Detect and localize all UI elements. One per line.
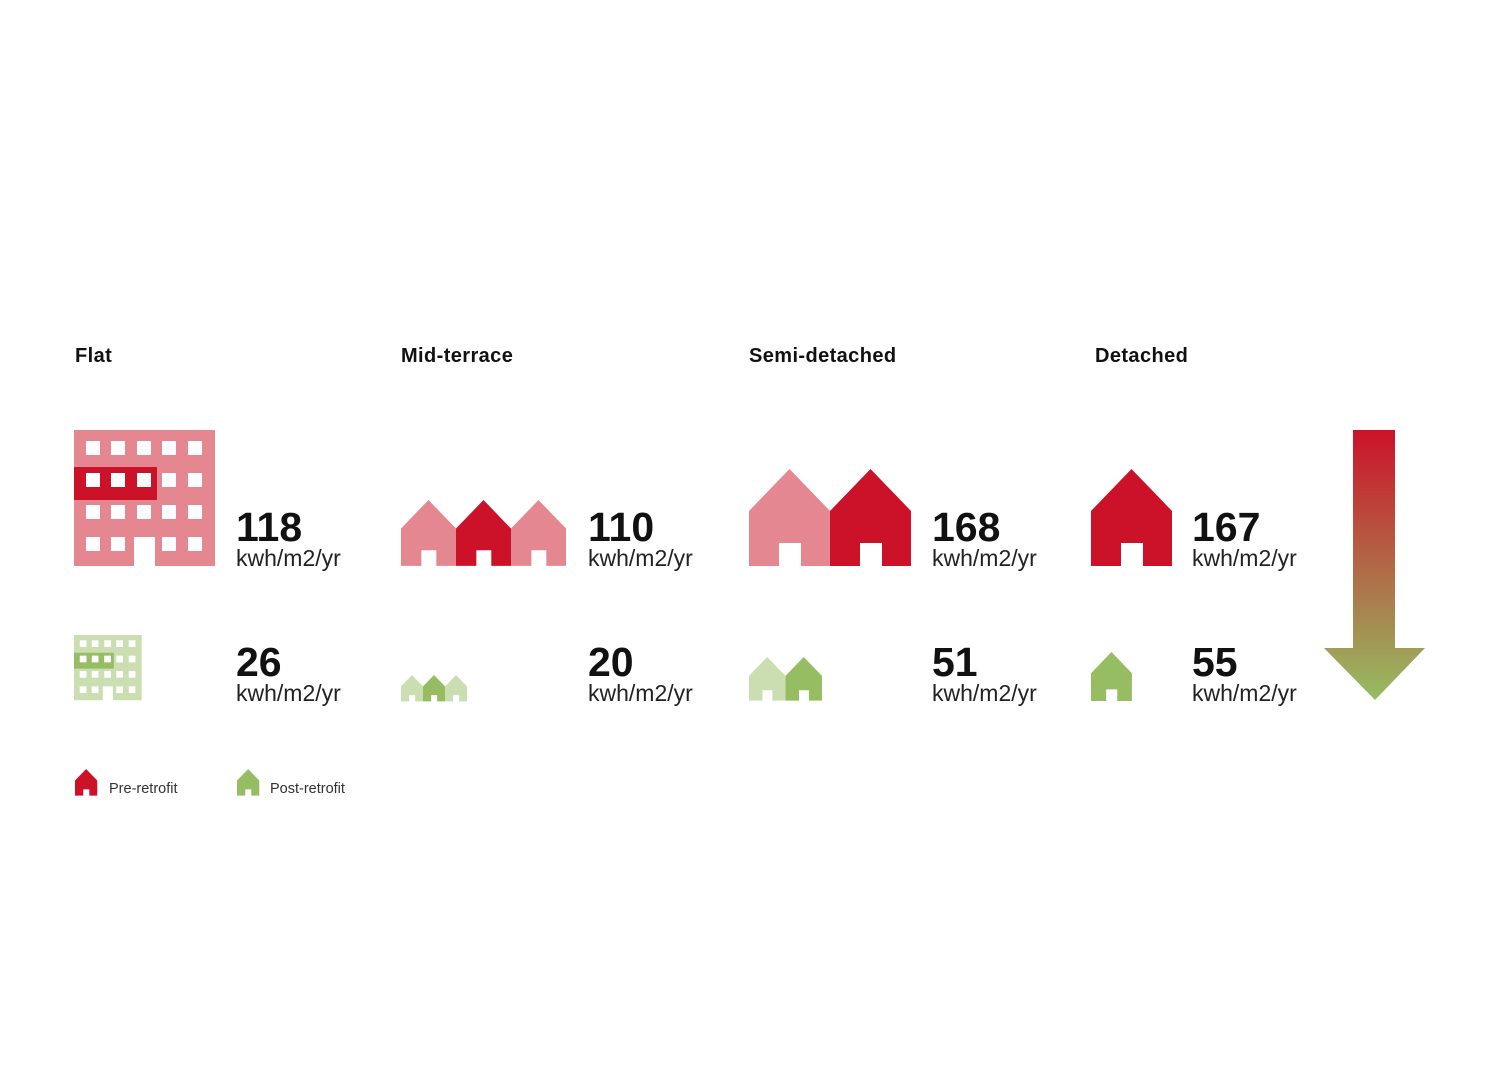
- value: flat post: 26: [236, 639, 282, 685]
- value: detached post: 55: [1192, 639, 1238, 685]
- value: detached post: [1192, 639, 1297, 706]
- icon: semi-detached post-retrofit: [749, 657, 822, 701]
- value: mid-terrace post: [588, 639, 693, 706]
- value: detached post: kwh/m2/yr: [1192, 680, 1297, 706]
- icon: semi-detached pre-retrofit: [749, 469, 911, 566]
- legend: [75, 769, 345, 797]
- value: flat pre: kwh/m2/yr: [236, 545, 341, 571]
- arrow: reduction gradient: [1324, 430, 1425, 700]
- title: Mid-terrace: Mid-terrace: [401, 345, 513, 367]
- legend text post: Post-retrofit: [270, 781, 345, 797]
- value: flat pre: 118: [236, 504, 302, 550]
- icon: flat pre-retrofit: [74, 430, 215, 566]
- icon: detached pre-retrofit: [1091, 469, 1172, 566]
- icon: detached post-retrofit: [1091, 652, 1132, 701]
- value: detached pre: 167: [1192, 504, 1260, 550]
- value: semi pre: kwh/m2/yr: [932, 545, 1037, 571]
- title: Semi-detached: Semi-detached: [749, 345, 896, 367]
- value: semi post: 51: [932, 639, 978, 685]
- icon: flat post-retrofit: [74, 635, 142, 700]
- icon: pre-retrofit legend: [75, 769, 97, 796]
- title: Flat: Flat: [75, 345, 112, 367]
- value: mid-terrace pre: kwh/m2/yr: [588, 545, 693, 571]
- value: flat post: kwh/m2/yr: [236, 680, 341, 706]
- value: semi post: kwh/m2/yr: [932, 680, 1037, 706]
- legend text pre: Pre-retrofit: [109, 781, 178, 797]
- value: flat pre: [236, 504, 341, 571]
- value: flat post: [236, 639, 341, 706]
- value: detached pre: kwh/m2/yr: [1192, 545, 1297, 571]
- value: detached pre: [1192, 504, 1297, 571]
- value: mid-terrace post: kwh/m2/yr: [588, 680, 693, 706]
- value: semi pre: [932, 504, 1037, 571]
- value: mid-terrace pre: 110: [588, 504, 654, 550]
- value: mid-terrace pre: [588, 504, 693, 571]
- title: Detached: Detached: [1095, 345, 1188, 367]
- value: semi post: [932, 639, 1037, 706]
- value: semi pre: 168: [932, 504, 1000, 550]
- value: mid-terrace post: 20: [588, 639, 634, 685]
- icon: mid-terrace post-retrofit: [401, 675, 467, 701]
- icon: mid-terrace pre-retrofit: [401, 500, 566, 566]
- icon: post-retrofit legend: [237, 769, 259, 796]
